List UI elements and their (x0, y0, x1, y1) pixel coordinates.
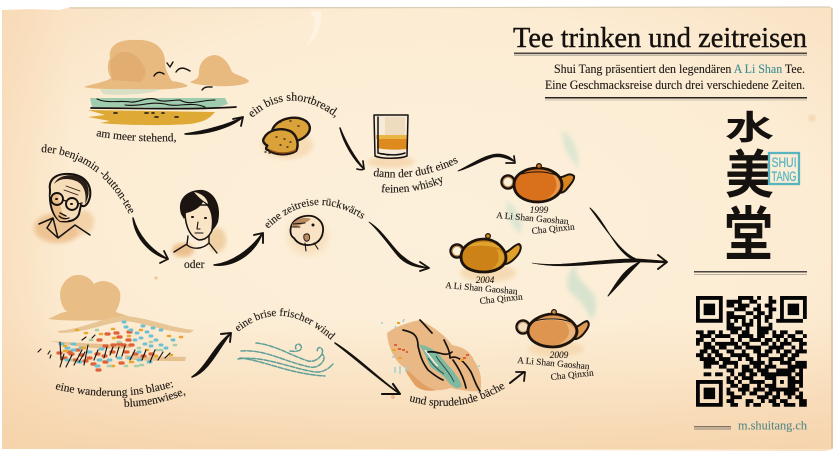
illustration: beach with clouds and birds (84, 40, 249, 125)
label: tea 2004 (445, 276, 524, 307)
label: tea 2004: A Li Shan Gaoshan (445, 281, 518, 297)
label: tea 2004: Cha Qinxin (479, 292, 524, 307)
label: tea 1999 (496, 206, 576, 237)
label: tea 2004: 2004 (476, 276, 495, 286)
arrow: oder to zeitreise (214, 233, 263, 265)
steam: teapot 1999 (506, 131, 578, 234)
icon: teapot 2004 (450, 234, 521, 282)
icon: teapot 2009 (516, 310, 589, 357)
illustration: old man portrait (34, 174, 94, 243)
illustration: young person portrait (172, 190, 226, 257)
illustration: flower meadow with cloud (38, 275, 194, 370)
logo: Chinese characters: 堂 (724, 187, 773, 272)
website link (694, 418, 808, 432)
arrow: baeche to teapot 2009 (510, 372, 525, 383)
label: und sprudelnde baeche: und sprudelnde bäche (410, 384, 505, 408)
icon: wind (238, 343, 333, 376)
logo: Chinese characters: 美 (725, 135, 774, 208)
illustration: mountain stream (382, 319, 481, 391)
logo: Shui Tang stamp: TANG (772, 169, 796, 184)
subtitle: Shui Tang präsentiert den legendären A Li Shan Tee. (554, 62, 805, 76)
title rule (514, 52, 807, 56)
arrow: benjamin to oder (133, 218, 168, 263)
label: dann der duft eines feinen whisky: feinen whisky (381, 176, 442, 193)
arrow: brise to bach (335, 343, 400, 394)
label: eine zeitreise rueckwaerts: eine zeitreise rückwärts (266, 198, 364, 228)
arrow: wiese to brise (192, 333, 231, 377)
label: tea 2009 (517, 351, 595, 383)
label: tea 2009: 2009 (550, 351, 569, 361)
label: ein biss shortbread: ein biss shortbread, (250, 92, 338, 118)
arrow: shortbread to whisky (340, 128, 364, 170)
arrow: zeitreise to teapot 2004 (369, 222, 429, 271)
arrow: meer to shortbread (185, 117, 243, 134)
label: dann der duft eines feinen whisky (374, 158, 458, 193)
logo: Shui Tang stamp (769, 153, 799, 184)
subtitle rule (545, 97, 807, 100)
arrow: three tea lines merging (532, 208, 667, 296)
title: Tee trinken und zeitreisen (513, 22, 807, 54)
label: eine wanderung ins blaue blumenwiese: blumenwiese, (124, 390, 186, 407)
label: eine wanderung ins blaue blumenwiese (56, 382, 186, 407)
icon: teapot 1999 (502, 164, 574, 202)
label: tea 1999: A Li Shan Gaoshan (496, 211, 569, 227)
label: eine brise frischer wind: eine brise frischer wind (236, 308, 336, 340)
label: tea 1999: Cha Qinxin (531, 222, 576, 237)
arrow: whisky to teapot 1999 (458, 154, 515, 171)
label: dann der duft eines feinen whisky: dann der duft eines (374, 158, 458, 178)
label: der benjamin button tee: der benjamin -button-tee (42, 144, 134, 214)
subtitle: Eine Geschmacksreise durch drei verschiedene Zeiten. (545, 78, 805, 92)
subtitle (545, 62, 805, 92)
label: tea 1999: 1999 (530, 206, 549, 216)
logo: Chinese characters (724, 102, 774, 272)
QR code (696, 298, 807, 405)
icon: shortbread (261, 115, 313, 159)
label: oder: oder (184, 259, 205, 271)
steam: teapot 2009 (567, 264, 596, 320)
logo: Shui Tang stamp: SHUI (772, 155, 796, 170)
logo rule (694, 271, 807, 275)
logo: Chinese characters: 水 (725, 102, 774, 149)
label: eine wanderung ins blaue blumenwiese: eine wanderung ins blaue: (56, 382, 174, 398)
website link: m.shuitang.ch (738, 418, 808, 432)
label: tea 2009: A Li Shan Gaoshan (517, 356, 590, 372)
illustration: baby head (288, 216, 328, 255)
label: am meer stehend: am meer stehend, (96, 131, 176, 143)
label: tea 2009: Cha Qinxin (550, 368, 595, 383)
icon: whisky glass (367, 115, 415, 168)
